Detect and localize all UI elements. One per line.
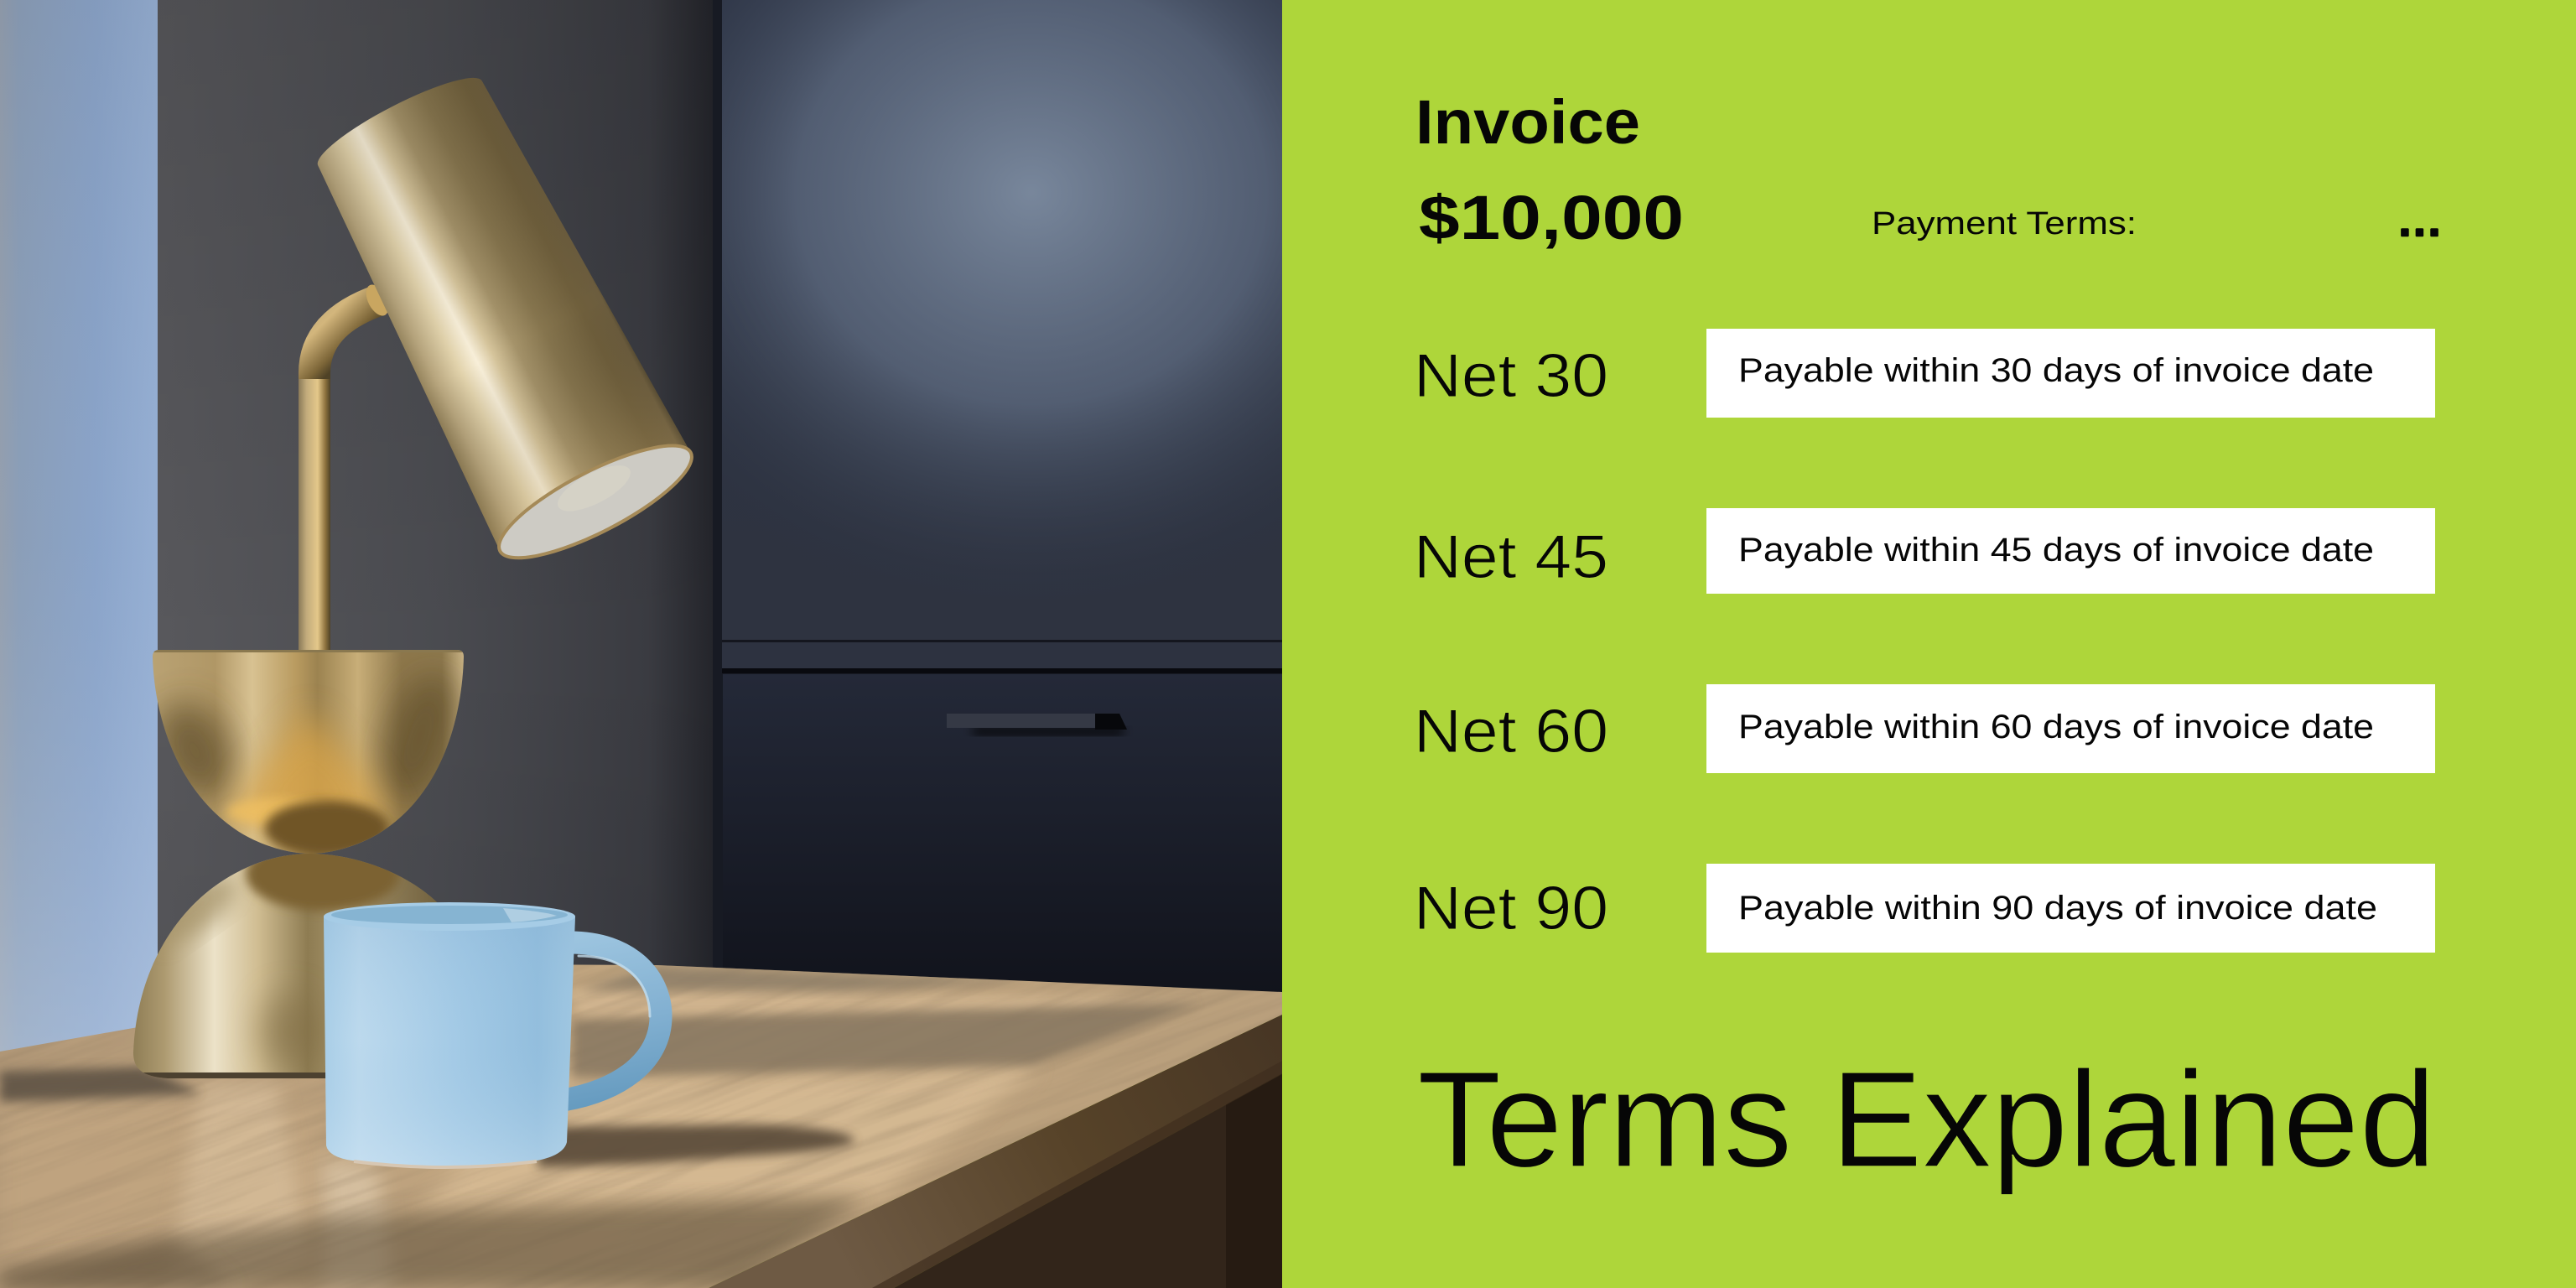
mug handle (564, 943, 661, 1100)
row: Net 30: Net 30 (1414, 342, 1608, 410)
lamp stem (299, 281, 393, 658)
shadow: lamp base (0, 1067, 201, 1102)
upper bowl (142, 649, 470, 856)
shadow: back edge (579, 966, 1031, 991)
label: Payment Terms: Payment Terms: (1872, 206, 2137, 242)
row: Net 45: Payable within 45 days of invoice date (1738, 532, 2374, 569)
row: Net 30: Payable within 30 days of invoice date (1738, 352, 2374, 389)
row: Net 60: Net 60 (1414, 698, 1608, 766)
row: Net 45: Net 45 (1414, 523, 1608, 591)
shadow: bottom area (0, 1199, 864, 1288)
row: Net 45 (1414, 508, 2435, 594)
panel: interior photograph (0, 0, 1282, 1288)
row: Net 90: Net 90 (1414, 875, 1608, 943)
light patches (574, 991, 1117, 1016)
navy cabinet (713, 0, 1282, 1010)
mug body (324, 917, 575, 1167)
lamp (126, 58, 704, 1080)
lamp shade (296, 58, 704, 578)
drawer handle (947, 714, 1127, 735)
mug rim (324, 902, 575, 931)
amount: $10,000: $10,000 (1419, 183, 1684, 252)
panel: payment terms (1282, 0, 2576, 1288)
heading: Invoice: Invoice (1415, 87, 1640, 157)
grey wall (158, 0, 721, 1090)
shadow: band behind mug (572, 1004, 1199, 1078)
wood grain (0, 964, 1282, 1288)
row: Net 90 (1414, 864, 2435, 953)
window light strip (0, 0, 159, 1090)
row: Net 60: Payable within 60 days of invoice date (1738, 709, 2374, 745)
shadow: mug cast shadow (537, 1124, 855, 1167)
blue mug (324, 902, 661, 1167)
wooden table (0, 964, 1282, 1288)
table edge shadow (872, 1061, 1282, 1288)
row: Net 60 (1414, 684, 2435, 773)
row: Net 90: Payable within 90 days of invoice date (1738, 890, 2377, 927)
title: Terms Explained: Terms Explained (1417, 1042, 2436, 1196)
row: Net 30 (1414, 329, 2435, 418)
lower dome (133, 854, 438, 1078)
more menu dots: ... (2399, 198, 2440, 245)
